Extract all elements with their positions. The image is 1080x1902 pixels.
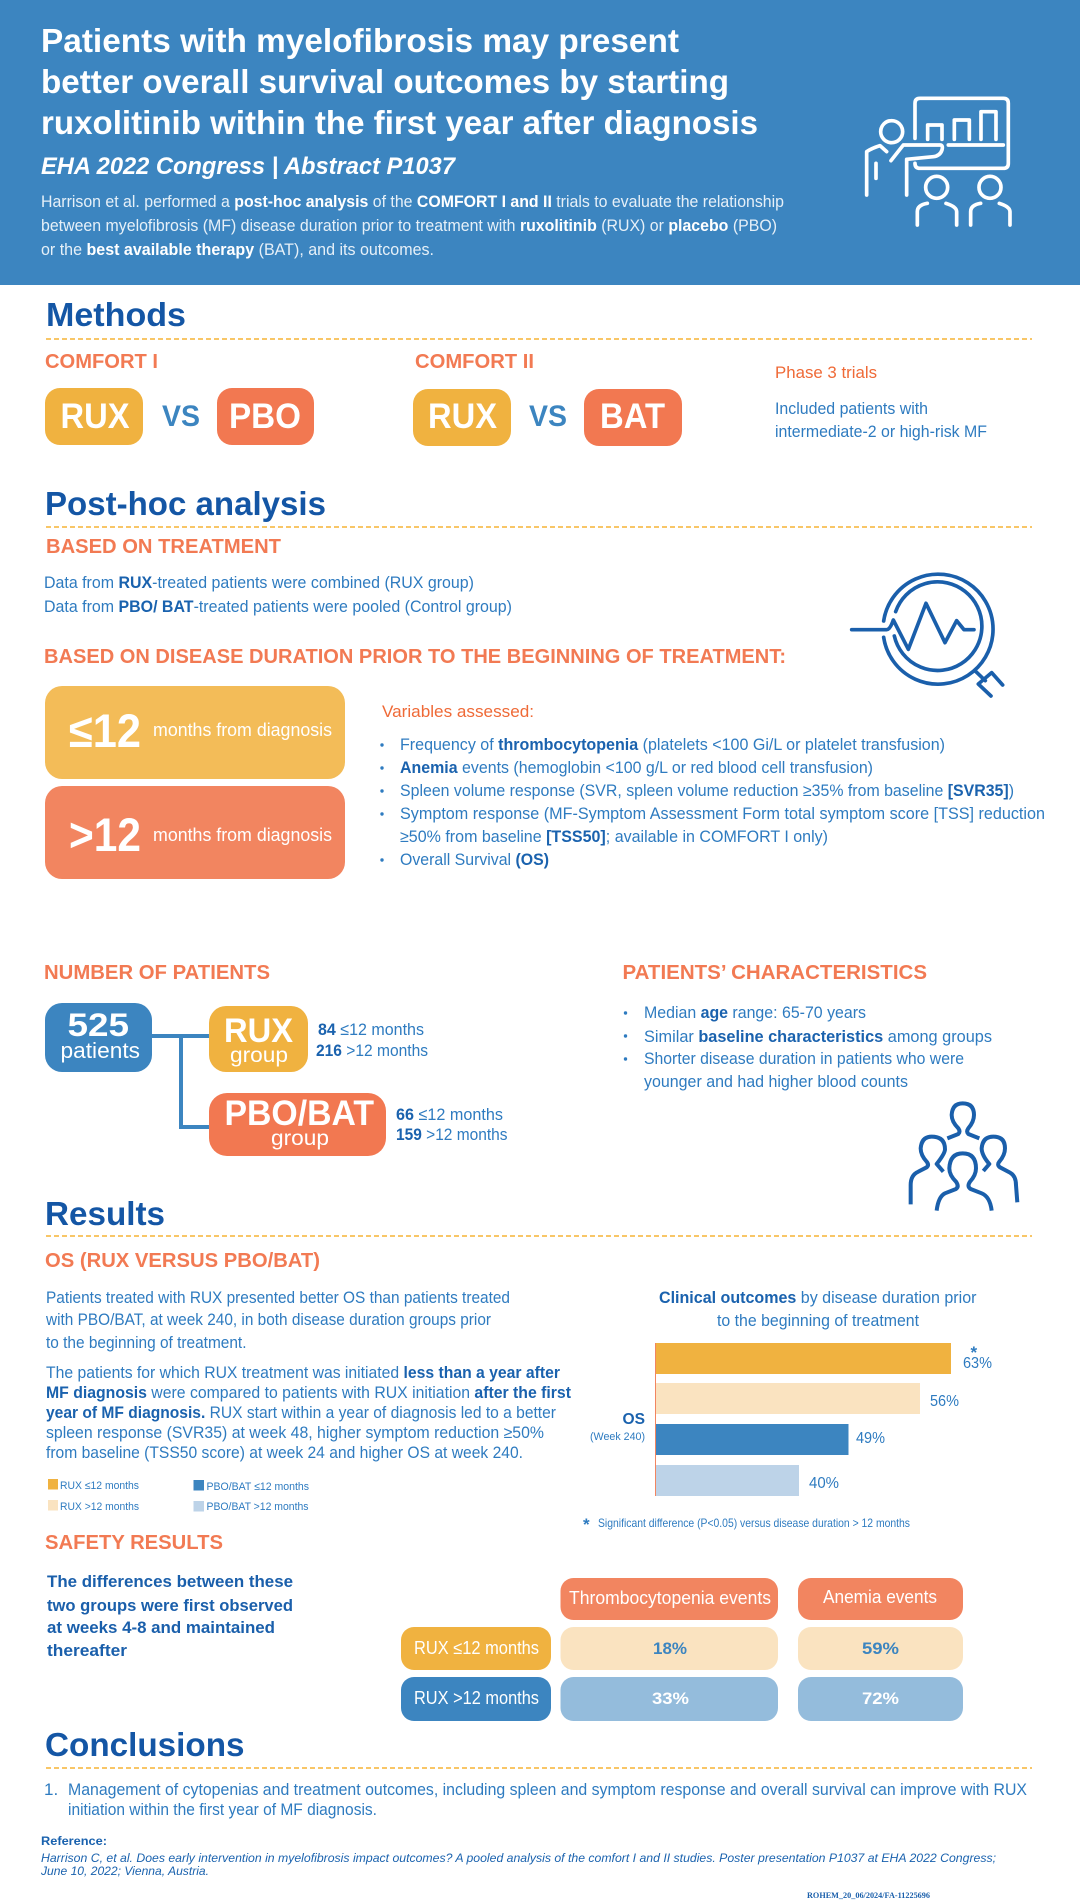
variables assessed list bbox=[380, 703, 1045, 869]
comparison: RUX vs BAT: VS bbox=[529, 400, 567, 433]
variables assessed list: ≥50% from baseline [TSS50]; available in COMFORT I only) bbox=[400, 828, 828, 846]
bar: PBO/BAT up to 12 months 49% bbox=[656, 1424, 885, 1455]
trial description: Phase 3 trials bbox=[775, 364, 877, 382]
comparison: RUX vs PBO: VS bbox=[162, 400, 200, 433]
panel: header banner bbox=[0, 0, 1080, 285]
chart legend: PBO/BAT ≤12 months bbox=[206, 1481, 309, 1493]
heading: post-hoc analysis: Post-hoc analysis bbox=[45, 486, 326, 523]
document code: ROHEM_20_06/2024/FA-11225696 bbox=[807, 1891, 930, 1900]
reference bbox=[40, 1834, 996, 1878]
footnote: significance: * bbox=[583, 1515, 590, 1534]
bar: PBO/BAT up to 12 months 49%: 49% bbox=[856, 1430, 885, 1447]
reference: June 10, 2022; Vienna, Austria. bbox=[40, 1864, 209, 1878]
box: over 12 months: months from diagnosis bbox=[153, 825, 332, 845]
box: PBO/BAT group: group bbox=[271, 1127, 329, 1150]
header: thrombocytopenia events bbox=[560, 1578, 778, 1620]
bar: RUX up to 12 months 63% bbox=[656, 1343, 992, 1374]
row: RUX over 12 months: RUX >12 months bbox=[414, 1688, 539, 1708]
comparison: RUX vs BAT: BAT bbox=[600, 397, 665, 436]
box: up to 12 months: ≤12 bbox=[69, 704, 141, 757]
icon: magnifier with pulse line bbox=[852, 574, 1003, 696]
comparison: RUX vs PBO: RUX bbox=[60, 397, 130, 436]
bar: PBO/BAT over 12 months 40%: 40% bbox=[809, 1475, 839, 1492]
reference: Reference: bbox=[41, 1834, 107, 1848]
box: PBO/BAT group bbox=[209, 1093, 386, 1156]
safety statement bbox=[47, 1572, 293, 1660]
conclusion item: initiation within the first year of MF diagnosis. bbox=[68, 1800, 377, 1819]
title: Patients with myelofibrosis may present bbox=[41, 22, 679, 59]
trial description: intermediate-2 or high-risk MF bbox=[775, 423, 987, 441]
panel: conclusions bbox=[44, 1727, 1032, 1819]
treatment text: Data from RUX-treated patients were combined (RUX group) bbox=[44, 574, 474, 592]
characteristics list: Median age range: 65-70 years bbox=[644, 1004, 866, 1022]
heading: methods: Methods bbox=[46, 297, 186, 334]
subheading: patients' characteristics: PATIENTS’ CHARACTERISTICS bbox=[622, 962, 927, 984]
congress subtitle: EHA 2022 Congress | Abstract P1037 bbox=[41, 153, 457, 180]
bar: RUX up to 12 months 63%: 63% bbox=[963, 1355, 992, 1372]
panel: number of patients bbox=[44, 962, 508, 1156]
intro text: or the best available therapy (BAT), and its outcomes. bbox=[41, 241, 434, 259]
box: over 12 months: >12 bbox=[69, 808, 141, 861]
header: thrombocytopenia events: Thrombocytopenia events bbox=[569, 1588, 771, 1608]
safety table bbox=[401, 1578, 963, 1721]
panel: safety results bbox=[45, 1532, 963, 1721]
safety statement: thereafter bbox=[47, 1641, 127, 1660]
comparison: RUX vs PBO bbox=[45, 388, 314, 445]
chart title: to the beginning of treatment bbox=[717, 1312, 919, 1330]
panel: patients' characteristics bbox=[622, 962, 1017, 1211]
box: up to 12 months bbox=[45, 686, 345, 779]
trial description bbox=[775, 364, 987, 441]
OS summary paragraph bbox=[45, 1289, 510, 1352]
conclusion item: 1. bbox=[44, 1780, 58, 1799]
safety statement: The differences between these bbox=[47, 1572, 293, 1591]
OS detail paragraph: MF diagnosis were compared to patients with RUX initiation after the first bbox=[46, 1384, 571, 1402]
box: PBO/BAT group: PBO/BAT bbox=[224, 1094, 374, 1133]
bar: RUX over 12 months 56% bbox=[656, 1383, 959, 1414]
row: RUX over 12 months: 72% bbox=[862, 1689, 899, 1708]
box: 525 patients: patients bbox=[60, 1038, 140, 1063]
comparison: RUX vs PBO: PBO bbox=[229, 397, 301, 436]
axis label: OS bbox=[622, 1411, 645, 1428]
OS summary paragraph: with PBO/BAT, at week 240, in both disease duration groups prior bbox=[45, 1311, 491, 1329]
header: anemia events: Anemia events bbox=[823, 1587, 937, 1607]
box: 525 patients: 525 bbox=[68, 1007, 129, 1043]
panel: results bbox=[45, 1196, 1032, 1534]
panel: methods bbox=[45, 297, 1032, 446]
OS detail paragraph: spleen response (SVR35) at week 48, higher symptom reduction ≥50% bbox=[46, 1424, 544, 1442]
variables assessed list: Anemia events (hemoglobin <100 g/L or red blood cell transfusion) bbox=[400, 759, 873, 777]
heading: conclusions: Conclusions bbox=[45, 1727, 244, 1764]
axis label bbox=[590, 1411, 645, 1443]
OS summary paragraph: Patients treated with RUX presented better OS than patients treated bbox=[46, 1289, 510, 1307]
reference: Harrison C, et al. Does early intervention in myelofibrosis impact outcomes? A pooled analysis of the comfort I and II studies. Poster presentation P1037 at EHA 2022 Congress; bbox=[41, 1851, 996, 1865]
axis label: (Week 240) bbox=[590, 1431, 645, 1443]
variables assessed list: Frequency of thrombocytopenia (platelets <100 Gi/L or platelet transfusion) bbox=[400, 736, 945, 754]
box: RUX group: RUX bbox=[224, 1012, 293, 1050]
characteristics list: Similar baseline characteristics among groups bbox=[644, 1028, 992, 1046]
variables assessed list: Variables assessed: bbox=[382, 703, 534, 721]
icon: group of people bbox=[911, 1103, 1017, 1211]
subheading: based on disease duration: BASED ON DISEASE DURATION PRIOR TO THE BEGINNING OF TREATMENT: bbox=[44, 646, 786, 668]
trial description: Included patients with bbox=[775, 400, 928, 418]
treatment text bbox=[44, 574, 512, 616]
icon: presenter with audience bbox=[867, 98, 1010, 225]
bar: PBO/BAT over 12 months 40% bbox=[656, 1465, 839, 1496]
subheading: safety results: SAFETY RESULTS bbox=[45, 1532, 223, 1554]
chart legend bbox=[48, 1479, 309, 1513]
characteristics list: Shorter disease duration in patients who were bbox=[644, 1050, 964, 1068]
chart title: Clinical outcomes by disease duration prior bbox=[659, 1289, 977, 1307]
variables assessed list: Symptom response (MF-Symptom Assessment Form total symptom score [TSS] reduction bbox=[400, 805, 1045, 823]
PBO/BAT group counts: 159 >12 months bbox=[396, 1125, 508, 1144]
characteristics list bbox=[624, 1004, 992, 1091]
box: over 12 months bbox=[45, 786, 345, 879]
heading: results: Results bbox=[45, 1196, 165, 1233]
OS detail paragraph: year of MF diagnosis. RUX start within a year of diagnosis led to a better bbox=[46, 1404, 556, 1422]
OS detail paragraph: The patients for which RUX treatment was initiated less than a year after bbox=[46, 1364, 561, 1382]
title bbox=[41, 22, 758, 141]
row: RUX up to 12 months: 59% bbox=[862, 1639, 899, 1658]
subheading: OS: OS (RUX VERSUS PBO/BAT) bbox=[45, 1250, 320, 1272]
RUX group counts: 216 >12 months bbox=[316, 1041, 428, 1060]
row: RUX over 12 months: 33% bbox=[652, 1689, 689, 1708]
box: RUX group bbox=[209, 1006, 308, 1072]
footnote: significance bbox=[583, 1515, 910, 1534]
intro text: Harrison et al. performed a post-hoc analysis of the COMFORT I and II trials to evaluate the relationship bbox=[41, 193, 784, 211]
box: RUX group: group bbox=[230, 1044, 288, 1067]
OS detail paragraph bbox=[46, 1364, 571, 1462]
box: 525 patients bbox=[45, 1003, 152, 1072]
PBO/BAT group counts: 66 ≤12 months bbox=[396, 1105, 503, 1124]
panel: post-hoc analysis bbox=[44, 486, 1045, 879]
characteristics list: younger and had higher blood counts bbox=[644, 1073, 908, 1091]
intro text bbox=[41, 193, 784, 259]
row: RUX up to 12 months: 18% bbox=[653, 1639, 687, 1658]
PBO/BAT group counts bbox=[396, 1105, 508, 1144]
box: up to 12 months: months from diagnosis bbox=[153, 720, 332, 740]
header: anemia events bbox=[798, 1578, 963, 1620]
title: ruxolitinib within the first year after diagnosis bbox=[41, 104, 758, 141]
RUX group counts bbox=[316, 1020, 428, 1060]
chart title bbox=[659, 1289, 977, 1330]
comparison: RUX vs BAT bbox=[413, 389, 682, 446]
variables assessed list: Overall Survival (OS) bbox=[400, 851, 549, 869]
intro text: between myelofibrosis (MF) disease duration prior to treatment with ruxolitinib (RUX) or placebo (PBO) bbox=[41, 217, 777, 235]
variables assessed list: Spleen volume response (SVR, spleen volume reduction ≥35% from baseline [SVR35]) bbox=[400, 782, 1014, 800]
RUX group counts: 84 ≤12 months bbox=[318, 1020, 424, 1039]
bar chart: clinical outcomes bbox=[590, 1289, 992, 1496]
bar: RUX up to 12 months 63%: * bbox=[970, 1343, 978, 1362]
treatment text: Data from PBO/ BAT-treated patients were pooled (Control group) bbox=[44, 598, 512, 616]
row: RUX up to 12 months: RUX ≤12 months bbox=[414, 1638, 539, 1658]
comparison: RUX vs BAT: RUX bbox=[428, 397, 498, 436]
subheading: based on treatment: BASED ON TREATMENT bbox=[46, 536, 281, 558]
safety statement: two groups were first observed bbox=[47, 1596, 293, 1615]
row: RUX up to 12 months bbox=[401, 1627, 963, 1670]
title: better overall survival outcomes by starting bbox=[41, 63, 729, 100]
row: RUX over 12 months bbox=[401, 1677, 963, 1721]
subheading: number of patients: NUMBER OF PATIENTS bbox=[44, 962, 270, 984]
chart legend: RUX >12 months bbox=[60, 1501, 139, 1513]
conclusion item: Management of cytopenias and treatment outcomes, including spleen and symptom response and overall survival can improve with RUX bbox=[68, 1780, 1027, 1799]
footnote: significance: Significant difference (P<0.05) versus disease duration > 12 months bbox=[598, 1516, 910, 1530]
OS summary paragraph: to the beginning of treatment. bbox=[46, 1334, 246, 1352]
label: COMFORT I: COMFORT I bbox=[45, 351, 158, 373]
chart legend: RUX ≤12 months bbox=[60, 1480, 139, 1492]
connector lines bbox=[152, 1036, 209, 1127]
safety statement: at weeks 4-8 and maintained bbox=[47, 1618, 275, 1637]
bar: RUX over 12 months 56%: 56% bbox=[930, 1393, 959, 1410]
chart legend: PBO/BAT >12 months bbox=[206, 1501, 309, 1513]
label: COMFORT II: COMFORT II bbox=[415, 351, 534, 373]
OS detail paragraph: from baseline (TSS50 score) at week 24 and higher OS at week 240. bbox=[46, 1444, 523, 1462]
conclusion item bbox=[44, 1780, 1027, 1819]
